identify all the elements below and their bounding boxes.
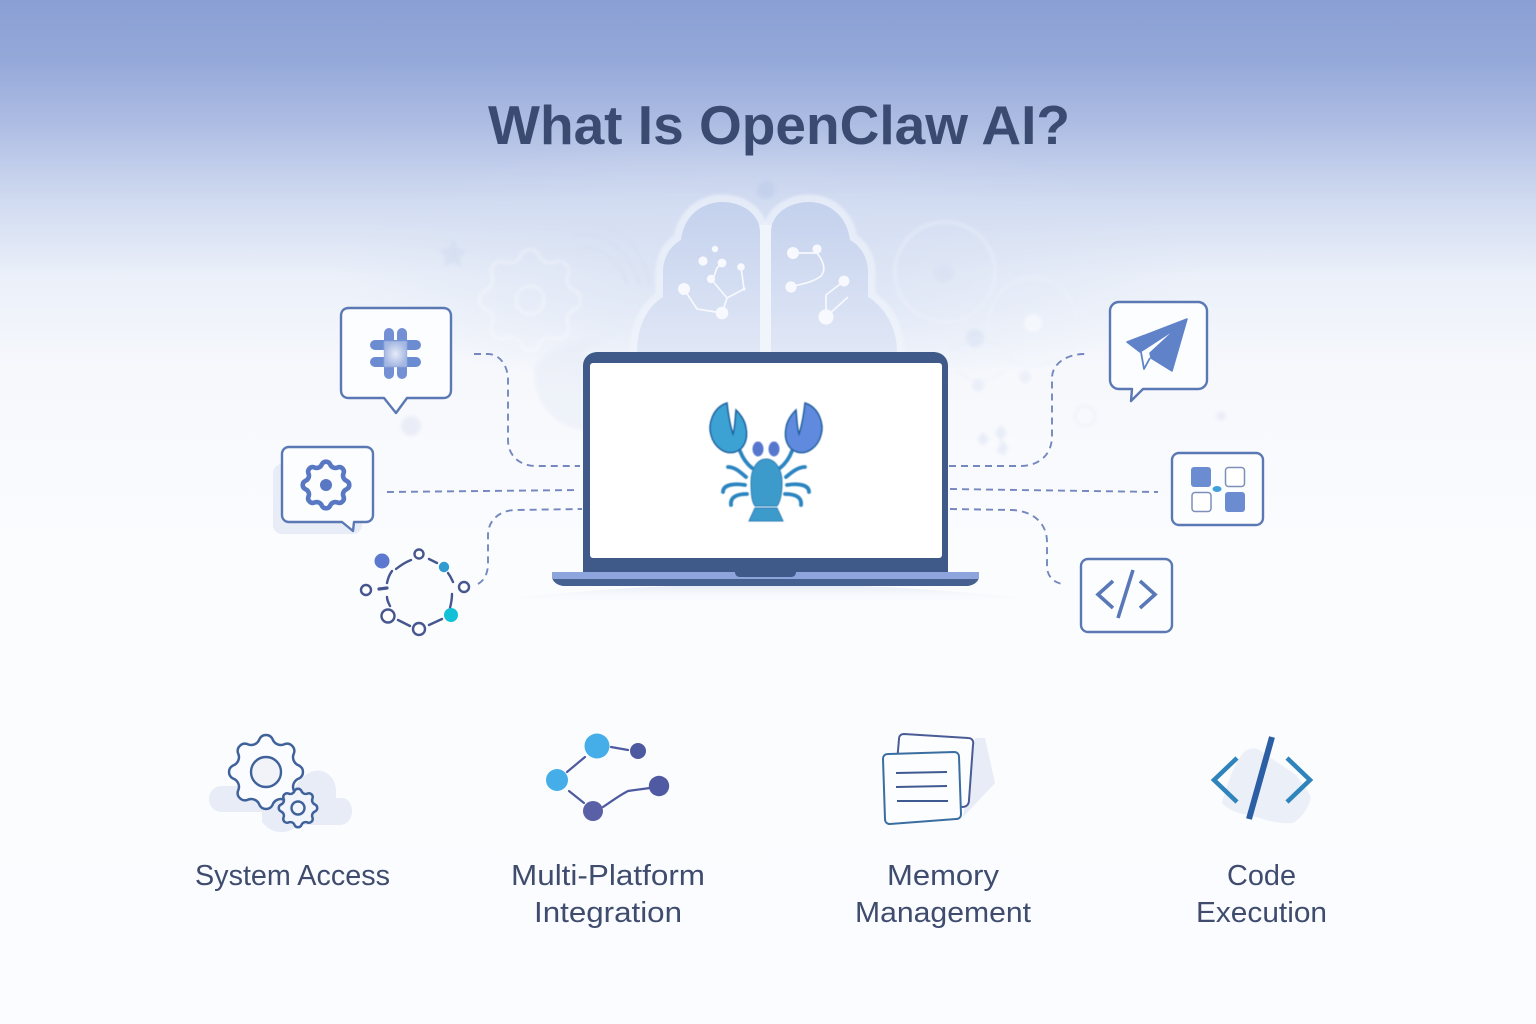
icon: lobster xyxy=(710,403,822,521)
body xyxy=(751,459,782,506)
laptop lid xyxy=(583,352,948,572)
icon: telegram chat bubble xyxy=(1110,302,1207,401)
icon: slack chat bubble xyxy=(341,308,451,413)
feature: memory management xyxy=(855,734,1031,929)
icon: node ring xyxy=(361,550,469,635)
right claw xyxy=(785,403,822,453)
icon: gears on cloud xyxy=(209,735,352,832)
feature: system access xyxy=(195,735,390,892)
label: code execution: Code xyxy=(1227,860,1296,892)
icon: grid box xyxy=(1172,453,1263,525)
laptop shadow xyxy=(515,584,1022,604)
connector lines xyxy=(387,354,1158,584)
icon: code brackets xyxy=(1214,737,1311,823)
icon: brain with neural network xyxy=(637,202,897,352)
soft glow behind the brain xyxy=(336,130,1196,400)
label: multi-platform integration: Integration xyxy=(534,897,682,929)
icon: settings chat bubble xyxy=(273,447,373,534)
left claw xyxy=(710,403,747,453)
label: memory management: Memory xyxy=(887,860,1000,892)
label: memory management: Management xyxy=(855,897,1031,929)
tail xyxy=(749,508,783,521)
title: What Is OpenClaw AI? xyxy=(488,94,1070,156)
label: code execution: Execution xyxy=(1196,897,1327,929)
laptop base xyxy=(552,572,979,586)
icon: network nodes xyxy=(546,734,669,821)
feature: multi-platform integration xyxy=(511,734,705,929)
faint decorative background shapes xyxy=(401,181,1226,456)
eyes xyxy=(752,442,764,456)
laptop xyxy=(515,352,1022,604)
icon: code box xyxy=(1081,559,1172,632)
laptop notch xyxy=(735,572,796,577)
laptop base highlight xyxy=(552,572,979,579)
feature: code execution xyxy=(1196,737,1327,929)
icon: stacked documents xyxy=(883,734,995,824)
label: multi-platform integration: Multi-Platform xyxy=(511,860,705,892)
laptop screen xyxy=(590,363,942,558)
label: system access: System Access xyxy=(195,860,390,892)
